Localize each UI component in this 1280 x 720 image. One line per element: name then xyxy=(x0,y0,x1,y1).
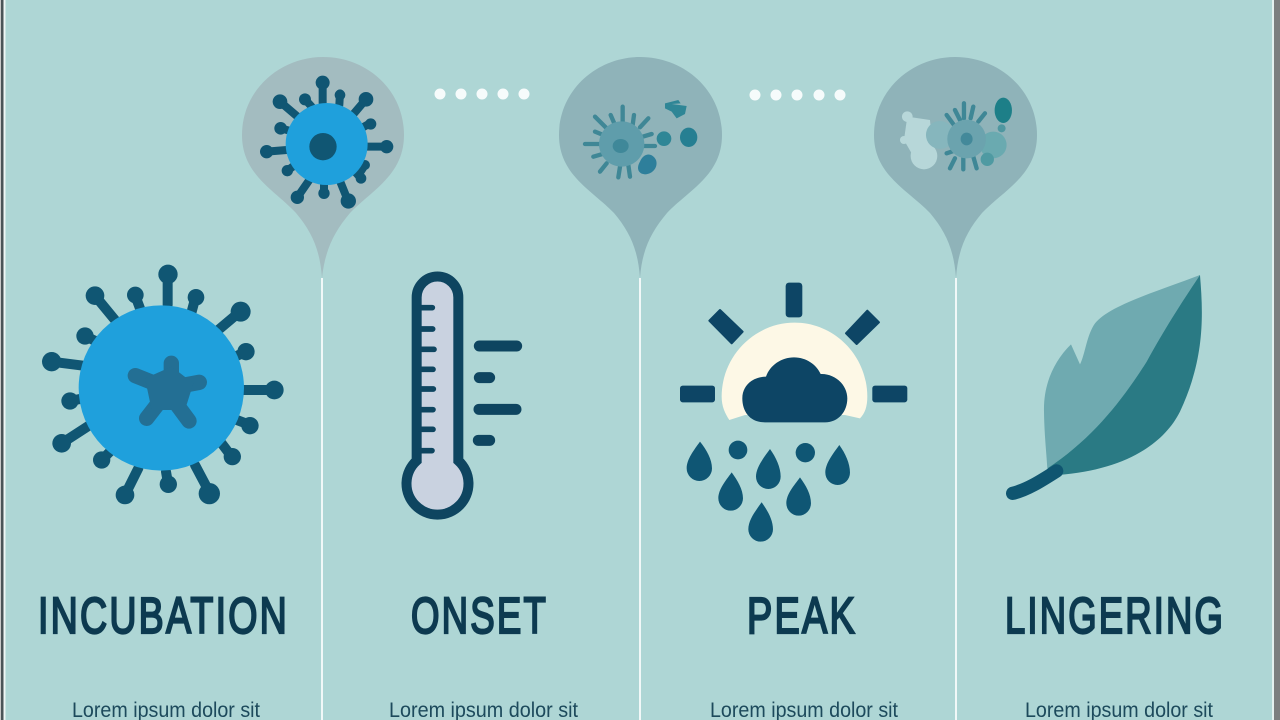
pin: onset virus xyxy=(559,57,722,278)
dots connector 1 xyxy=(434,88,530,100)
icon: sun cloud and rain xyxy=(680,283,907,542)
heading: peak: PEAK xyxy=(747,587,857,644)
icon: leaf xyxy=(1013,275,1202,493)
icon: thermometer xyxy=(406,276,517,515)
pin: peak virus xyxy=(874,57,1037,278)
icon: large virus xyxy=(42,265,284,504)
heading: incubation: INCUBATION xyxy=(38,587,289,644)
dots connector 2 xyxy=(750,90,846,100)
heading: onset: ONSET xyxy=(411,587,548,644)
pin: incubation virus xyxy=(242,57,404,278)
